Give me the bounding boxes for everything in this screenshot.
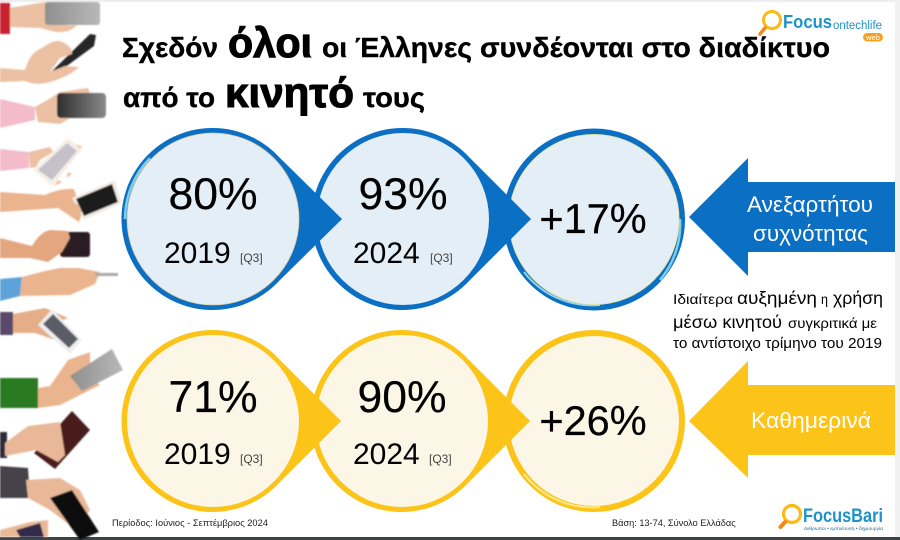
callout text: αυξημένη xyxy=(737,288,817,308)
callout text: το αντίστοιχο τρίμηνο του 2019 xyxy=(673,336,882,352)
title: οι Έλληνες xyxy=(322,32,472,63)
circle: 93% 2024: [Q3] xyxy=(430,251,453,265)
circle: 80% 2019 xyxy=(121,128,342,310)
circle: 71% 2019: 2019 xyxy=(164,438,231,471)
circle: 80% 2019: 80% xyxy=(168,170,258,219)
callout text: Ιδιαίτερα xyxy=(673,292,733,307)
arrow: independent of frequency: συχνότητας xyxy=(753,221,868,246)
hand 2 xyxy=(0,34,96,84)
circle: 71% 2019: 71% xyxy=(168,373,258,422)
circle: 93% 2024: 93% xyxy=(358,170,448,219)
hand 8 xyxy=(0,308,82,354)
title xyxy=(122,19,830,116)
logo: Focus on tech life: web xyxy=(865,33,880,42)
logo: Focus on tech life: Focus xyxy=(783,12,832,32)
circle: 71% 2019 xyxy=(121,330,341,512)
hand 3 xyxy=(0,88,106,128)
hand 11 xyxy=(0,466,99,540)
circle: 71% 2019: [Q3] xyxy=(240,452,263,466)
circle: 90% 2024: 2024 xyxy=(353,438,420,471)
column of hands holding phones xyxy=(0,2,123,540)
panel: blue row of circles xyxy=(121,128,683,310)
callout text: συγκριτικά με xyxy=(788,316,877,331)
circle: 90% 2024: 90% xyxy=(357,373,447,422)
logo: FocusBari xyxy=(780,506,883,531)
logo: FocusBari: FocusBari xyxy=(803,506,883,527)
logo: Focus on tech life: ontechlife xyxy=(833,20,882,32)
circle: 80% 2019: 2019 xyxy=(164,237,231,270)
footer: period: Περίοδος: Ιούνιος - Σεπτέμβριος 2024 xyxy=(112,518,268,528)
circle: +26% xyxy=(505,332,683,510)
circle: 90% 2024: [Q3] xyxy=(429,452,452,466)
arrow: independent of frequency xyxy=(689,158,895,276)
title: τους xyxy=(363,82,425,113)
circle: 93% 2024 xyxy=(311,128,531,310)
hand 6 xyxy=(0,230,90,262)
title: από το xyxy=(123,82,215,113)
hand 10 xyxy=(0,411,90,469)
logo: Focus on tech life xyxy=(760,12,883,42)
circle: +17%: +17% xyxy=(539,195,647,242)
hand 7 xyxy=(0,268,118,301)
circle: +26%: +26% xyxy=(539,397,647,444)
hand 4 xyxy=(0,138,82,186)
circle: 90% 2024 xyxy=(310,330,530,512)
title: όλοι xyxy=(228,19,312,66)
title: κινητό xyxy=(225,69,354,116)
callout text: χρήση xyxy=(833,288,883,308)
hand 1 xyxy=(0,2,100,34)
arrow: daily xyxy=(689,361,895,478)
callout text: η xyxy=(821,292,828,307)
panel: yellow row of circles xyxy=(121,330,683,512)
hand 5 xyxy=(0,180,122,222)
circle: 93% 2024: 2024 xyxy=(353,237,420,270)
circle: +17% xyxy=(505,130,683,308)
hand 12 xyxy=(0,520,48,537)
callout text: μέσω κινητού xyxy=(673,312,782,332)
hand 9 xyxy=(0,349,123,408)
logo: FocusBari: άνθρωποι • εμπνέουση • δημιουργία xyxy=(804,525,883,531)
footer: base: Βάση: 13-74, Σύνολο Ελλάδας xyxy=(612,518,736,528)
title: Σχεδόν xyxy=(122,32,218,63)
circle: 80% 2019: [Q3] xyxy=(240,251,263,265)
arrow: daily: Καθημερινά xyxy=(751,408,871,433)
arrow: independent of frequency: Ανεξαρτήτου xyxy=(747,192,873,217)
callout text xyxy=(673,288,883,352)
title: συνδέονται στο διαδίκτυο xyxy=(480,32,830,63)
